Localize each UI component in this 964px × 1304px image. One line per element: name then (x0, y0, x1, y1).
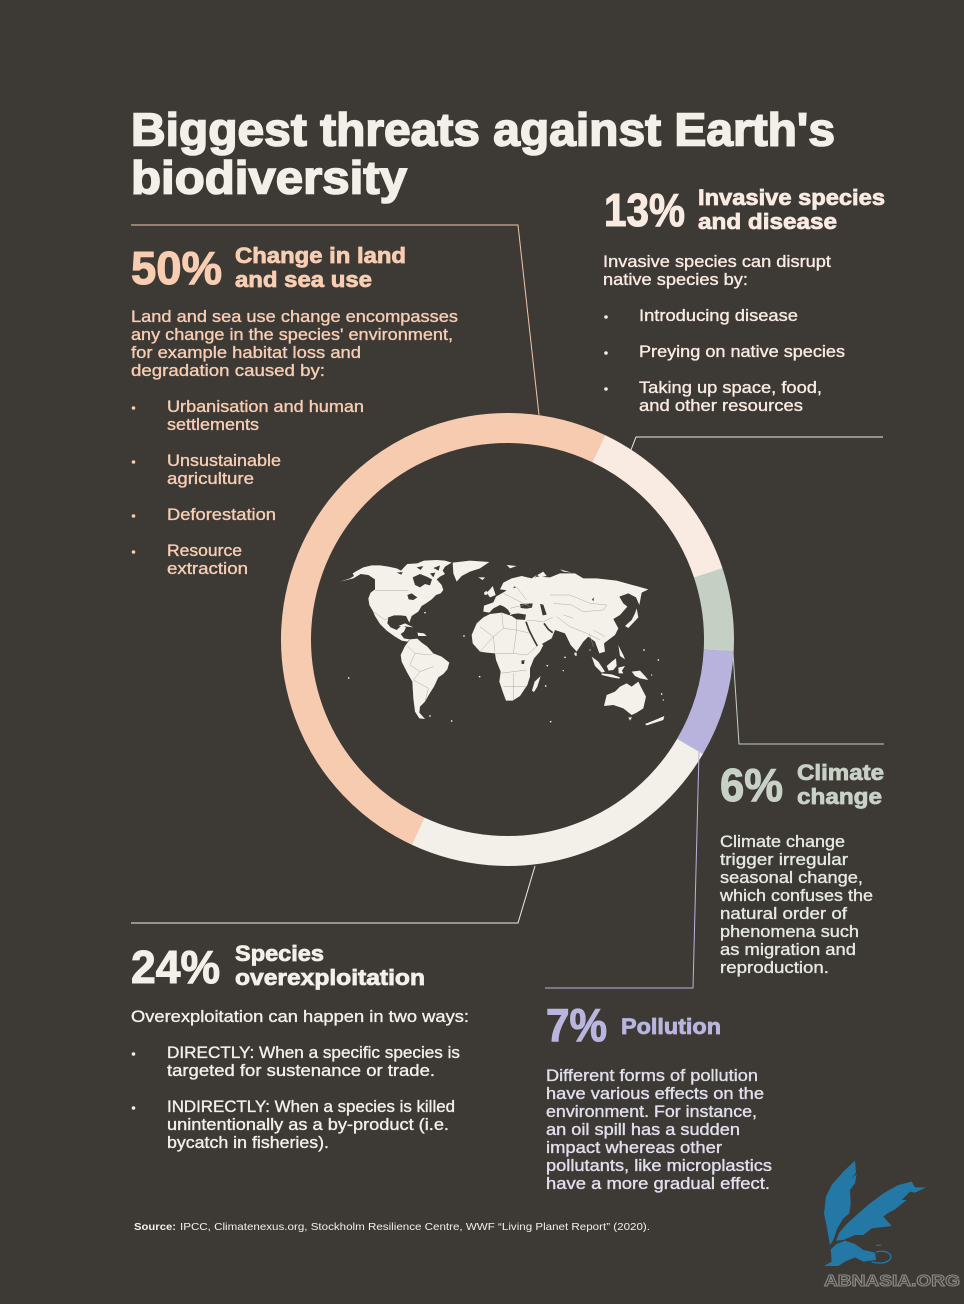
connector: pollution (545, 752, 699, 988)
panel: change in land and sea use: 50% (131, 242, 222, 294)
panel: change in land and sea use: Unsustainable (167, 452, 281, 470)
panel: pollution: environment. For instance, (546, 1103, 757, 1121)
panel: pollution: 7% (546, 999, 607, 1051)
panel: climate change: as migration and (720, 941, 856, 959)
panel: climate change (719, 759, 884, 977)
panel: species overexploitation: 24% (131, 941, 220, 993)
panel: invasive species and disease (603, 184, 885, 415)
panel: change in land and sea use: degradation caused by: (131, 362, 325, 380)
panel: pollution: impact whereas other (546, 1139, 723, 1157)
panel: species overexploitation: overexploitation (235, 965, 425, 990)
panel: climate change: natural order of (720, 905, 847, 923)
panel: pollution: pollutants, like microplastics (546, 1157, 772, 1175)
panel: species overexploitation: targeted for sustenance or trade. (167, 1062, 435, 1080)
panel: change in land and sea use: any change in the species' environment, (131, 326, 453, 344)
panel: climate change: trigger irregular (720, 851, 849, 869)
panel: change in land and sea use: extraction (167, 560, 248, 578)
panel: climate change: Climate (797, 760, 884, 785)
panel: species overexploitation: Overexploitation can happen in two ways: (131, 1008, 469, 1026)
panel: invasive species and disease: 13% (604, 184, 685, 236)
panel: change in land and sea use: Resource (167, 542, 242, 560)
panel: pollution: Different forms of pollution (546, 1067, 758, 1085)
title (131, 104, 835, 204)
panel: invasive species and disease: Taking up space, food, (639, 379, 822, 397)
panel: species overexploitation: DIRECTLY: When a specific species is (167, 1044, 460, 1062)
panel: invasive species and disease: Invasive species (698, 185, 885, 210)
panel: change in land and sea use: agriculture (167, 470, 254, 488)
panel: change in land and sea use: settlements (167, 416, 259, 434)
title: biodiversity (131, 152, 407, 204)
panel: change in land and sea use: Urbanisation and human (167, 398, 364, 416)
panel: change in land and sea use: Change in land (235, 243, 406, 268)
connector: land and sea use (131, 225, 539, 415)
panel: invasive species and disease: Introducing disease (639, 307, 798, 325)
panel: climate change: which confuses the (719, 887, 873, 905)
logo wordmark: ABNASIA.ORG (824, 1273, 960, 1290)
panel: climate change: 6% (720, 759, 783, 811)
icon: griffin (824, 1161, 926, 1266)
panel: pollution: an oil spill has a sudden (546, 1121, 740, 1139)
source note: Source: (134, 1221, 176, 1233)
connector: species overexploitation (131, 866, 535, 923)
panel: climate change: seasonal change, (720, 869, 863, 887)
panel: change in land and sea use (131, 242, 458, 578)
panel: pollution: Pollution (621, 1014, 721, 1039)
panel: change in land and sea use: Deforestation (167, 506, 276, 524)
world map (340, 560, 664, 725)
panel: invasive species and disease: and other resources (639, 397, 803, 415)
connector: climate change (733, 653, 884, 744)
panel: species overexploitation (131, 941, 469, 1152)
panel: species overexploitation: unintentionally as a by-product (i.e. (167, 1116, 449, 1134)
panel: invasive species and disease: Preying on native species (639, 343, 845, 361)
panel: change in land and sea use: for example habitat loss and (131, 344, 361, 362)
panel: species overexploitation: Species (235, 941, 324, 966)
panel: change in land and sea use: Land and sea use change encompasses (131, 308, 458, 326)
panel: change in land and sea use: and sea use (235, 267, 372, 292)
panel: invasive species and disease: Invasive species can disrupt (603, 253, 831, 271)
panel: species overexploitation: INDIRECTLY: When a species is killed (167, 1098, 455, 1116)
donut chart (218, 350, 797, 929)
panel: pollution: have various effects on the (546, 1085, 764, 1103)
panel: pollution: have a more gradual effect. (546, 1175, 770, 1193)
connector: invasive species (629, 437, 883, 455)
panel: climate change: change (797, 784, 882, 809)
panel: climate change: reproduction. (720, 959, 829, 977)
title: Biggest threats against Earth's (131, 104, 835, 156)
panel: invasive species and disease: native species by: (603, 271, 748, 289)
panel: climate change: phenomena such (720, 923, 859, 941)
panel: climate change: Climate change (720, 833, 845, 851)
panel: pollution (546, 999, 772, 1193)
panel: invasive species and disease: and disease (698, 209, 837, 234)
source note: IPCC, Climatenexus.org, Stockholm Resilience Centre, WWF “Living Planet Report” (2020). (180, 1221, 650, 1233)
watermark logo (824, 1161, 960, 1290)
panel: species overexploitation: bycatch in fisheries). (167, 1134, 329, 1152)
